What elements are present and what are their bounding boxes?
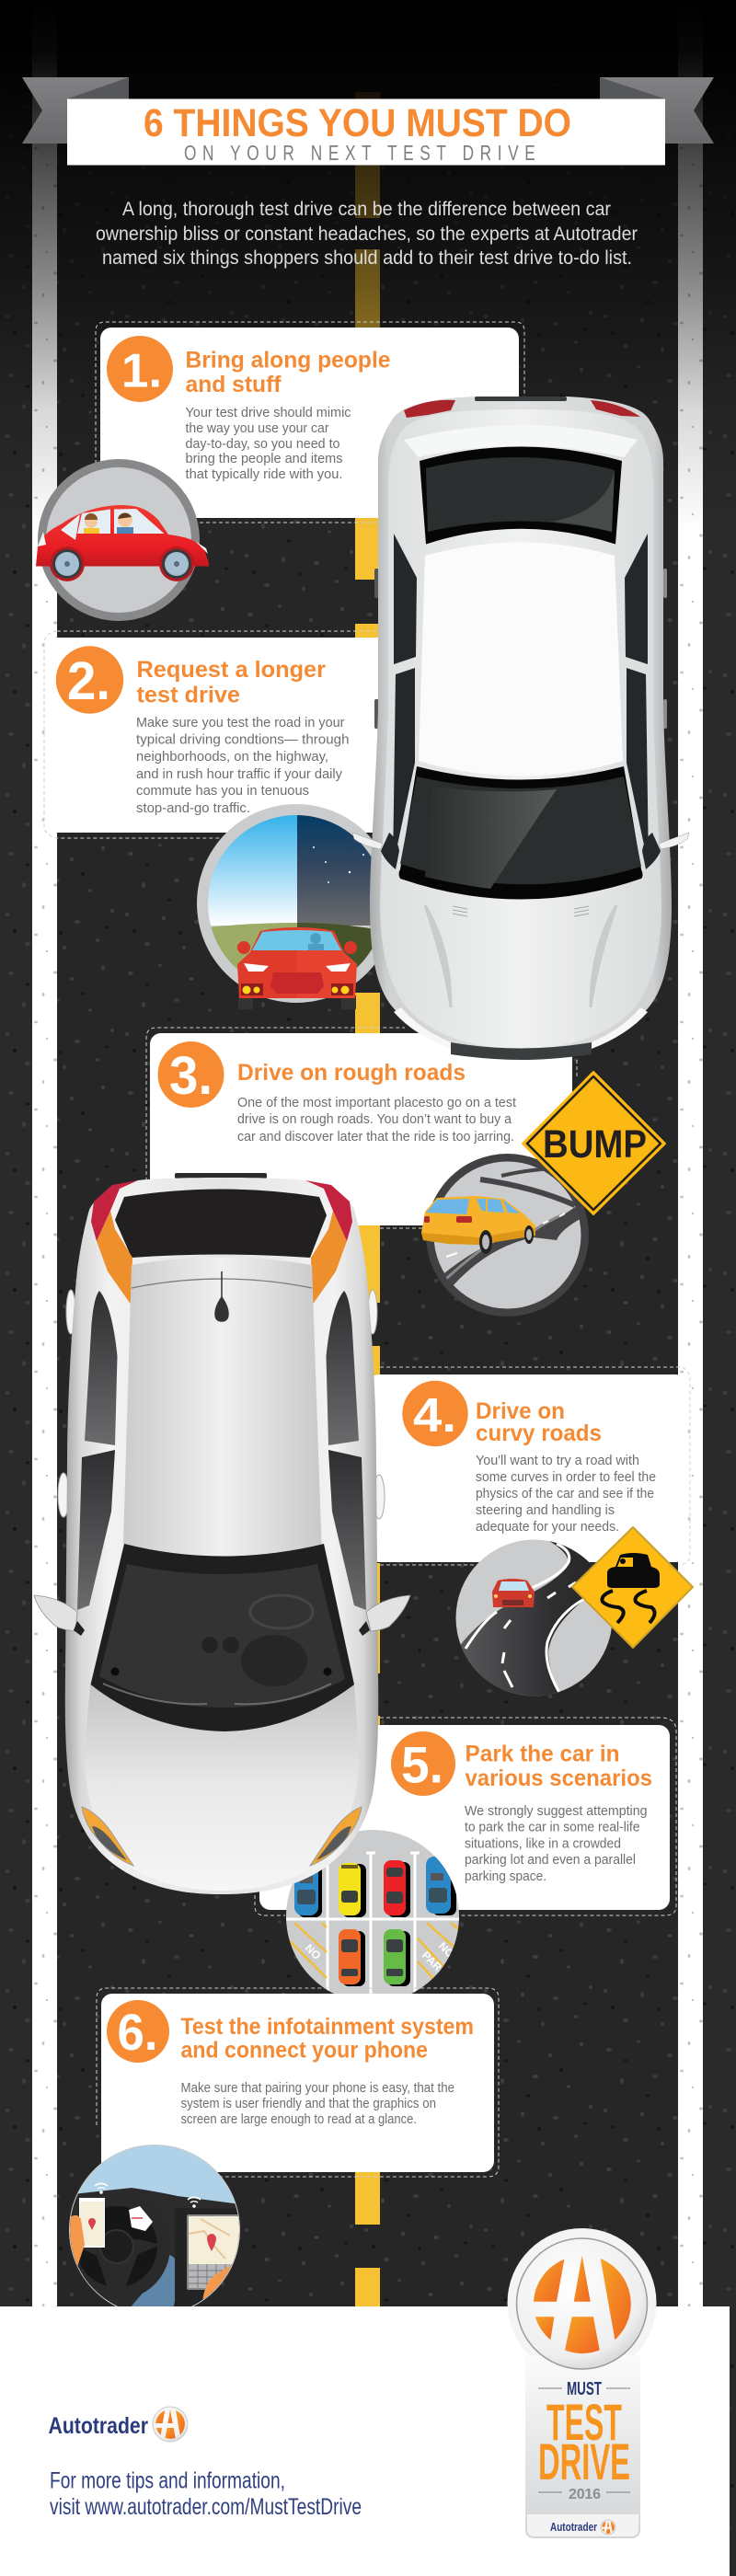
panel: step 2: commute has you in tenuous bbox=[136, 783, 309, 799]
icon: bump sign bbox=[523, 1072, 665, 1214]
badge: must test drive 2016: 2016 bbox=[569, 2487, 601, 2502]
panel: step 3: drive is on rough roads. You don’t want to buy a bbox=[237, 1111, 512, 1127]
intro text: ownership bliss or constant headaches, so the experts at Autotrader bbox=[96, 224, 638, 245]
badge: must test drive 2016 bbox=[508, 2228, 657, 2538]
icon: parking lot: NO bbox=[303, 1941, 324, 1962]
badge: must test drive 2016: TEST bbox=[546, 2393, 622, 2451]
panel: step 2: and in rush hour traffic if your daily bbox=[136, 766, 342, 782]
badge: must test drive 2016: DRIVE bbox=[538, 2432, 630, 2490]
panel: step 1: Your test drive should mimic bbox=[186, 405, 351, 420]
panel: step 3: One of the most important placesto go on a test bbox=[237, 1095, 517, 1110]
panel: step 5: situations, like in a crowded bbox=[465, 1836, 621, 1851]
car: lower silver car top view bbox=[34, 1173, 410, 1894]
title: 6 THINGS YOU MUST DO bbox=[144, 101, 571, 145]
panel: step 2: 2. bbox=[67, 651, 110, 711]
panel: step 4: adequate for your needs. bbox=[476, 1519, 619, 1535]
panel: step 5: parking space. bbox=[465, 1869, 546, 1884]
autotrader logo bbox=[48, 2407, 188, 2442]
panel: step 2: Make sure you test the road in your bbox=[136, 715, 345, 730]
panel: step 2: test drive bbox=[136, 683, 240, 708]
panel: step 2: neighborhoods, on the highway, bbox=[136, 749, 328, 765]
panel: step 4: You'll want to try a road with bbox=[476, 1453, 639, 1468]
car: upper white car top view bbox=[352, 397, 689, 1060]
panel: step 3: Drive on rough roads bbox=[237, 1060, 466, 1086]
panel: step 6: screen are large enough to read at a glance. bbox=[180, 2111, 417, 2127]
panel: step 5: to park the car in some real-life bbox=[465, 1820, 640, 1835]
panel: step 2: typical driving condtions— through bbox=[136, 732, 350, 747]
panel: step 3 bbox=[146, 1028, 577, 1233]
intro text: named six things shoppers should add to their test drive to-do list. bbox=[102, 247, 632, 269]
panel: step 6: and connect your phone bbox=[180, 2038, 428, 2064]
panel: step 5: We strongly suggest attempting bbox=[465, 1803, 648, 1819]
footer call to action: For more tips and information, bbox=[50, 2467, 285, 2493]
footer call to action bbox=[50, 2467, 362, 2520]
panel: step 5 bbox=[255, 1718, 676, 1915]
top dark fade bbox=[0, 0, 736, 534]
icon: yellow car on rough road bbox=[421, 1154, 589, 1317]
autotrader logo: Autotrader bbox=[48, 2413, 148, 2439]
subtitle: ON YOUR NEXT TEST DRIVE bbox=[184, 143, 535, 166]
panel: step 4: Drive on bbox=[476, 1398, 565, 1424]
panel: step 5: Park the car in bbox=[466, 1742, 620, 1767]
panel: step 4: some curves in order to feel the bbox=[476, 1469, 656, 1485]
panel: step 1 bbox=[96, 322, 524, 523]
icon: dashboard with phone and navigation bbox=[69, 2145, 240, 2306]
icon: day and night with red car bbox=[197, 804, 375, 1009]
panel: step 1: that typically ride with you. bbox=[186, 466, 342, 482]
panel: step 3: car and discover later that the ride is too jarring. bbox=[237, 1129, 514, 1144]
footer call to action: visit www.autotrader.com/MustTestDrive bbox=[50, 2494, 362, 2520]
badge: must test drive 2016: MUST bbox=[567, 2379, 602, 2399]
badge: must test drive 2016: Autotrader bbox=[550, 2520, 597, 2534]
panel: step 1: bring the people and items bbox=[186, 451, 342, 466]
panel: step 5: various scenarios bbox=[466, 1765, 652, 1791]
intro text: A long, thorough test drive can be the difference between car bbox=[122, 199, 611, 220]
panel: step 6: system is user friendly and that the graphics on bbox=[180, 2096, 436, 2111]
icon: parking lot bbox=[286, 1830, 459, 1994]
panel: step 2: stop-and-go traffic. bbox=[136, 800, 250, 816]
intro text bbox=[96, 199, 638, 269]
panel: step 4: physics of the car and see if the bbox=[476, 1486, 654, 1501]
panel: step 6: 6. bbox=[118, 2003, 158, 2061]
panel: step 3: 3. bbox=[169, 1046, 213, 1106]
panel: step 6: Test the infotainment system bbox=[180, 2014, 474, 2040]
panel: step 4 bbox=[368, 1367, 690, 1565]
panel: step 4: 4. bbox=[413, 1389, 456, 1443]
panel: step 2 bbox=[44, 631, 388, 838]
icon: bump sign: BUMP bbox=[543, 1122, 647, 1167]
panel: step 5: parking lot and even a parallel bbox=[465, 1852, 636, 1868]
panel: step 1: and stuff bbox=[186, 372, 282, 397]
icon: parking lot: NO bbox=[436, 1939, 457, 1961]
ribbon banner bbox=[22, 77, 714, 166]
panel: step 2: Request a longer bbox=[136, 657, 326, 683]
icon: parking lot: PARK bbox=[420, 1949, 450, 1980]
footer panel bbox=[0, 2306, 730, 2576]
icon: curvy road with red car bbox=[455, 1538, 616, 1702]
panel: step 1: the way you use your car bbox=[186, 420, 329, 436]
icon: red car with passengers bbox=[36, 459, 209, 621]
icon: slippery road sign bbox=[572, 1527, 693, 1648]
panel: step 6 bbox=[97, 1988, 499, 2177]
panel: step 1: 1. bbox=[121, 344, 162, 397]
panel: step 4: steering and handling is bbox=[476, 1502, 615, 1518]
panel: step 4: curvy roads bbox=[476, 1420, 602, 1446]
panel: step 1: day-to-day, so you need to bbox=[186, 436, 340, 452]
panel: step 1: Bring along people bbox=[186, 348, 391, 374]
panel: step 6: Make sure that pairing your phone is easy, that the bbox=[180, 2080, 454, 2096]
panel: step 5: 5. bbox=[401, 1735, 443, 1794]
yellow centre dashes bbox=[355, 92, 380, 2306]
